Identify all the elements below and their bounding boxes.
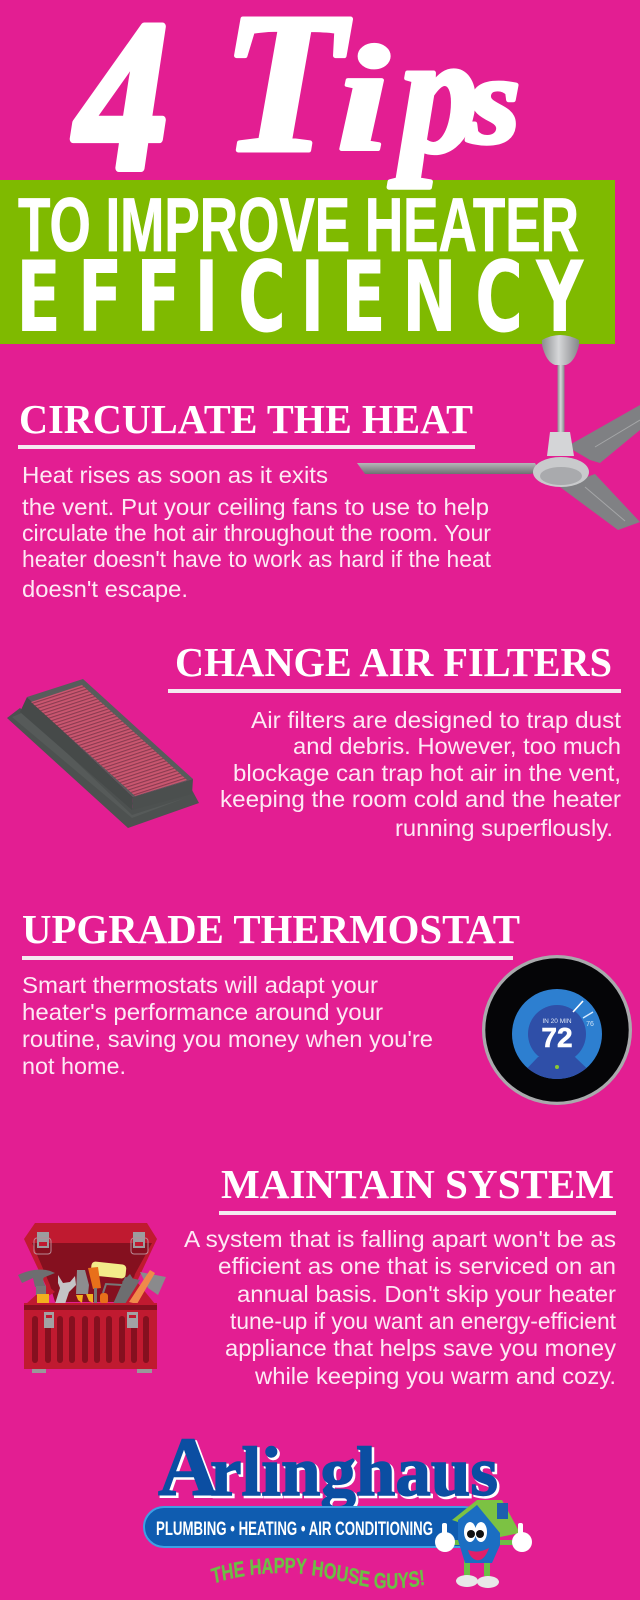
title: 4 Tips: s (467, 32, 520, 170)
body text: running superflously. (395, 815, 613, 841)
body text: A system that is falling apart won't be as (184, 1226, 616, 1252)
icon: smart thermostat (482, 955, 632, 1105)
section: change air filters (168, 639, 622, 841)
section: circulate the heat (18, 396, 492, 602)
body text: Air filters are designed to trap dust (251, 707, 622, 733)
title: 4 Tips: i (337, 16, 389, 182)
logo wordmark: A (160, 1423, 220, 1516)
body text: heater doesn't have to work as hard if the heat (22, 546, 492, 572)
body text: not home. (22, 1053, 126, 1079)
logo service pill (144, 1507, 484, 1547)
icon: smart thermostat: 76 (586, 1021, 594, 1028)
body text (22, 462, 492, 602)
logo wordmark: A (158, 1421, 218, 1514)
body text: efficient as one that is serviced on an (218, 1253, 616, 1279)
logo wordmark (158, 1421, 500, 1516)
banner: to improve heater efficiency (0, 180, 615, 354)
body text: blockage can trap hot air in the vent, (233, 760, 621, 786)
body text: Smart thermostats will adapt your (22, 972, 378, 998)
banner: to improve heater efficiency: EFFICIENCY (16, 241, 585, 354)
title: 4 Tips (73, 0, 520, 215)
logo wordmark: rlinghaus (210, 1434, 498, 1511)
heading: CHANGE AIR FILTERS (175, 639, 612, 685)
body text: keeping the room cold and the heater (220, 786, 621, 812)
logo: Arlinghaus (143, 1421, 532, 1589)
body text: annual basis. Don't skip your heater (237, 1281, 616, 1307)
logo wordmark: rlinghaus (212, 1436, 500, 1513)
body text: and debris. However, too much (293, 733, 621, 759)
logo tagline: THE HAPPY HOUSE GUYS! (210, 1558, 424, 1589)
heading: UPGRADE THERMOSTAT (22, 906, 520, 952)
heading: CIRCULATE THE HEAT (19, 396, 473, 442)
body text (220, 707, 622, 841)
body text: circulate the hot air throughout the room. Your (22, 520, 491, 546)
body text: doesn't escape. (22, 576, 188, 602)
body text: while keeping you warm and cozy. (254, 1363, 616, 1389)
body text: appliance that helps save you money (225, 1335, 617, 1361)
body text: the vent. Put your ceiling fans to use to help (22, 494, 489, 520)
icon: air filter (7, 679, 199, 828)
body text: tune-up if you want an energy-efficient (230, 1308, 617, 1334)
body text: heater's performance around your (22, 999, 383, 1025)
heading: MAINTAIN SYSTEM (221, 1161, 614, 1207)
icon: smart thermostat: IN 20 MIN (542, 1018, 572, 1025)
body text (22, 972, 433, 1079)
icon: toolbox (18, 1223, 166, 1373)
section: maintain system (184, 1161, 617, 1389)
section: upgrade thermostat (22, 906, 520, 1079)
icon: smart thermostat: 72 (541, 1022, 573, 1053)
body text: routine, saving you money when you're (22, 1026, 433, 1052)
body text (184, 1226, 617, 1389)
body text: Heat rises as soon as it exits (22, 462, 328, 488)
logo service pill: PLUMBING • HEATING • AIR CONDITIONING (156, 1519, 433, 1540)
title: 4 Tips: p (388, 0, 478, 188)
mascot: happy house (435, 1500, 532, 1588)
icon: ceiling fan (357, 335, 640, 530)
